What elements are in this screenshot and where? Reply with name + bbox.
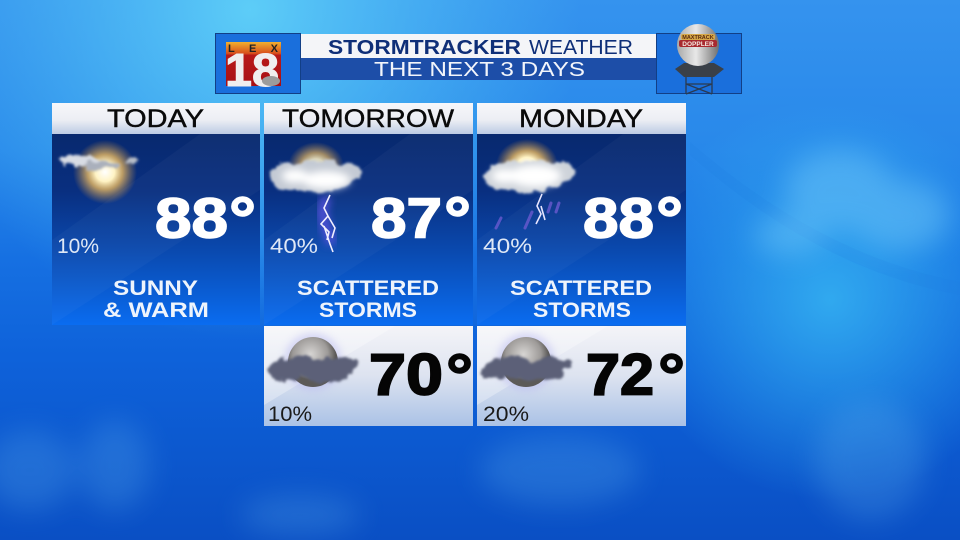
conditions <box>297 277 439 322</box>
icon: storm cloud with sun and rain <box>484 139 575 228</box>
precipitation chance: 10% <box>57 235 99 258</box>
precipitation chance: 40% <box>483 235 532 258</box>
LEX 18 logo <box>216 34 300 96</box>
high temperature: ° <box>229 185 256 254</box>
conditions: SCATTERED <box>297 277 439 300</box>
heading: monday <box>477 103 686 134</box>
icon: moon behind clouds <box>269 333 358 391</box>
heading: monday: MONDAY <box>519 105 643 133</box>
conditions: STORMS <box>533 299 631 322</box>
precipitation chance: 40% <box>270 235 318 258</box>
icon: sun with cloud <box>60 140 140 204</box>
radar tower <box>656 24 742 94</box>
high temperature: 88 <box>155 186 228 250</box>
high temperature: 87 <box>371 186 442 250</box>
high temperature <box>155 185 256 254</box>
precipitation chance: 20% <box>483 403 529 426</box>
conditions: & WARM <box>103 299 209 322</box>
low temperature: ° <box>658 342 685 411</box>
high temperature <box>583 185 683 254</box>
conditions: STORMS <box>319 299 417 322</box>
low temperature <box>369 342 473 411</box>
conditions: SUNNY <box>113 277 198 300</box>
panel: today <box>52 103 260 325</box>
LEX 18 logo: 18 <box>225 44 279 96</box>
conditions <box>510 277 652 322</box>
panel: monday <box>477 103 686 325</box>
high temperature: 88 <box>583 186 654 250</box>
title bar: STORMTRACKER <box>328 37 522 59</box>
station banner <box>216 24 742 96</box>
low temperature: 70 <box>369 342 443 408</box>
heading: tomorrow <box>264 103 473 134</box>
icon: storm cloud with sun <box>269 142 361 252</box>
LEX 18 logo: LEX <box>228 43 279 55</box>
title bar: WEATHER <box>529 37 633 59</box>
low temperature <box>586 342 685 411</box>
conditions <box>103 277 209 322</box>
radar tower: DOPPLER <box>682 41 714 48</box>
precipitation chance: 10% <box>268 403 312 426</box>
heading: today <box>52 103 260 134</box>
heading: today: TODAY <box>107 105 204 133</box>
heading: tomorrow: TOMORROW <box>282 105 454 133</box>
title bar: THE NEXT 3 DAYS <box>374 59 585 81</box>
low temperature: ° <box>446 342 473 411</box>
high temperature: ° <box>444 185 471 254</box>
panel: monday night <box>477 326 686 426</box>
panel: tomorrow night <box>264 326 473 426</box>
radar tower: MAXTRACK <box>682 35 714 41</box>
low temperature: 72 <box>586 342 654 408</box>
high temperature <box>371 185 471 254</box>
title bar <box>300 34 656 81</box>
panel: tomorrow <box>264 103 473 325</box>
high temperature: ° <box>656 185 683 254</box>
conditions: SCATTERED <box>510 277 652 300</box>
icon: moon behind clouds <box>482 333 571 391</box>
